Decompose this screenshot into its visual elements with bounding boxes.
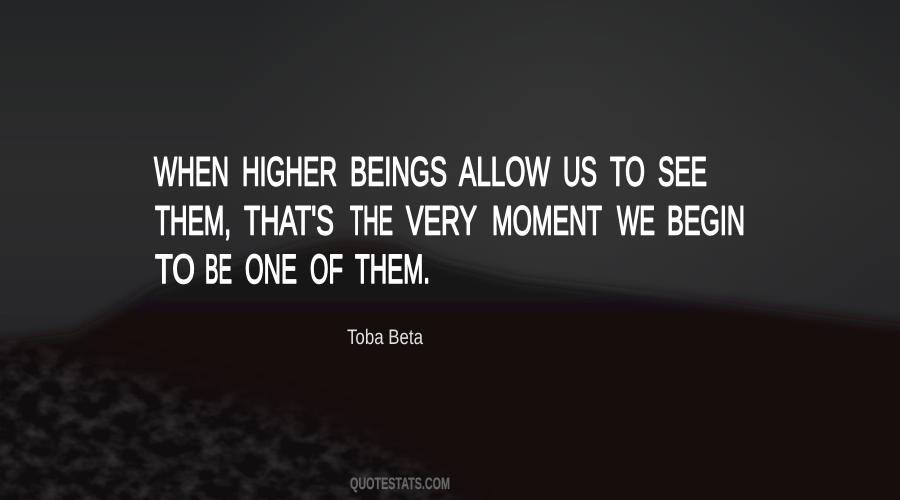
quote line 2: VERY [406, 198, 477, 244]
author name: Toba Beta [347, 326, 423, 349]
quote line 3: ONE [245, 246, 297, 292]
quote line 1: ALLOW [459, 148, 550, 194]
quote line 2: MOMENT [492, 198, 602, 244]
quote line 2: THEM, [155, 198, 231, 244]
quote line 2: THE [350, 198, 393, 244]
quote line 2: BEGIN [667, 198, 745, 244]
quote text [154, 148, 745, 292]
quote line 1: BEINGS [350, 148, 447, 194]
background: mountain silhouette [0, 238, 900, 500]
quote line 1: WHEN [154, 148, 229, 194]
quote line 1: HIGHER [242, 148, 337, 194]
watermark: QUOTESTATS.COM [350, 475, 450, 493]
quote line 2: WE [617, 198, 655, 244]
quote line 1: SEE [658, 148, 707, 194]
quote line 3: THEM. [355, 246, 430, 292]
quote line 3: OF [310, 246, 343, 292]
background: rocks in foreground [0, 347, 450, 500]
quote line 1: US [563, 148, 597, 194]
quote line 3: BE [205, 246, 232, 292]
quote line 2: THAT'S [244, 198, 334, 244]
quote line 3: TO [155, 246, 195, 292]
quote line 1: TO [610, 148, 645, 194]
